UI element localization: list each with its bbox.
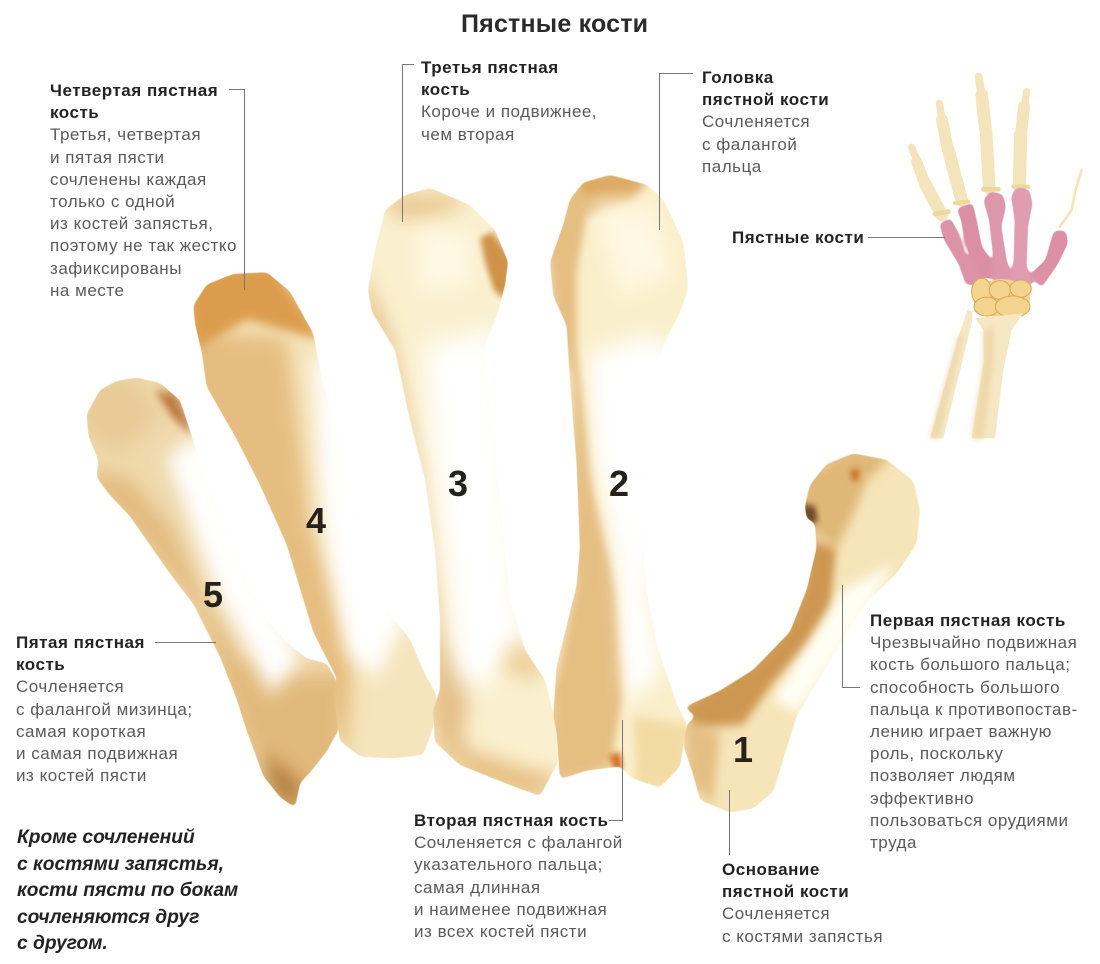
label: metacarpal head: пальца [702, 157, 762, 176]
label: second metacarpal: указательного пальца; [414, 855, 603, 874]
label: fourth metacarpal: Четвертая пястная [50, 81, 218, 100]
label: fourth metacarpal: только с одной [50, 192, 175, 211]
note: articulations [17, 827, 238, 954]
label: first metacarpal: кость большого пальца; [870, 655, 1070, 674]
carpal bones [972, 278, 1031, 318]
number 1: 1 [733, 729, 753, 770]
bone 3 [368, 188, 558, 795]
bone 4 [193, 272, 436, 758]
leader lines [155, 64, 945, 855]
label: third metacarpal: Короче и подвижнее, [421, 102, 597, 121]
label: fourth metacarpal: на месте [50, 281, 124, 300]
illustration: metacarpal bones, hand skeleton and leader lines [86, 64, 1083, 855]
bone 1 [684, 454, 920, 812]
number 2: 2 [609, 463, 629, 504]
label: fourth metacarpal: и пятая пясти [50, 148, 165, 167]
label: fifth metacarpal: кость [16, 655, 65, 674]
number 3: 3 [448, 463, 468, 504]
label: third metacarpal: кость [421, 80, 470, 99]
label: fifth metacarpal: Пятая пястная [16, 633, 145, 652]
label: fourth metacarpal: сочленены каждая [50, 170, 207, 189]
label: third metacarpal: Третья пястная [421, 58, 559, 77]
note: articulations: Кроме сочленений [17, 827, 195, 848]
label: metacarpal head: с фалангой [702, 135, 797, 154]
label: second metacarpal: Вторая пястная кость [414, 811, 608, 830]
note: articulations: сочленяются друг [17, 906, 199, 928]
label: first metacarpal: труда [870, 833, 917, 852]
label: first metacarpal: эффективно [870, 789, 974, 808]
label: fifth metacarpal: из костей пясти [16, 766, 147, 785]
label: first metacarpal: роль, поскольку [870, 744, 1003, 763]
label: metacarpals on hand: Пястные кости [732, 228, 864, 247]
label: fifth metacarpal: самая короткая [16, 722, 146, 741]
label: fourth metacarpal: поэтому не так жестко [50, 236, 237, 255]
number 5: 5 [203, 574, 223, 615]
label: fifth metacarpal: Сочленяется [16, 677, 124, 696]
label: third metacarpal: чем вторая [421, 125, 515, 144]
label: metacarpal base: пястной кости [722, 882, 849, 901]
label: fourth metacarpal: из костей запястья, [50, 214, 213, 233]
label: metacarpal base [722, 860, 883, 946]
label: fifth metacarpal: и самая подвижная [16, 744, 178, 763]
note: articulations: кости пясти по бокам [17, 880, 238, 901]
bone 5 [86, 378, 338, 806]
label: first metacarpal: лению играет важную [870, 722, 1052, 741]
label: second metacarpal: Сочленяется с фалангой [414, 833, 623, 852]
label: metacarpal head: Головка [702, 68, 774, 87]
bone 2 [547, 170, 693, 800]
label: fifth metacarpal: с фалангой мизинца; [16, 700, 193, 719]
label: metacarpal head: пястной кости [702, 90, 829, 109]
note: articulations: с костями запястья, [17, 854, 224, 874]
label: first metacarpal: пальца к противопостав- [870, 700, 1078, 719]
label: metacarpal head [702, 68, 829, 176]
label: first metacarpal: способность большого [870, 678, 1060, 697]
label: first metacarpal: Первая пястная кость [870, 611, 1066, 630]
label: fourth metacarpal: Третья, четвертая [50, 125, 201, 144]
label: fourth metacarpal: зафиксированы [50, 259, 182, 278]
label: fourth metacarpal: кость [50, 103, 99, 122]
label: second metacarpal: и наименее подвижная [414, 900, 607, 919]
label: fourth metacarpal [50, 81, 237, 300]
title: Пястные кости [461, 10, 648, 38]
label: first metacarpal: Чрезвычайно подвижная [870, 633, 1077, 652]
label: third metacarpal [421, 58, 597, 144]
forearm bones [930, 310, 1023, 438]
label: first metacarpal [870, 611, 1078, 852]
label: second metacarpal: самая длинная [414, 878, 541, 897]
label: first metacarpal: позволяет людям [870, 766, 1016, 785]
note: articulations: с другом. [17, 933, 108, 954]
number 4: 4 [306, 500, 326, 541]
label: second metacarpal [414, 811, 623, 941]
label: second metacarpal: из всех костей пясти [414, 922, 587, 941]
metacarpals highlighted pink [939, 187, 1068, 288]
label: metacarpal base: с костями запястья [722, 927, 883, 946]
label: metacarpal head: Сочленяется [702, 112, 810, 131]
label: metacarpal base: Сочленяется [722, 904, 830, 923]
label: fifth metacarpal [16, 633, 193, 785]
label: first metacarpal: пользоваться орудиями [870, 811, 1068, 830]
icon: hand skeleton [912, 77, 1082, 438]
label: metacarpal base: Основание [722, 860, 820, 879]
